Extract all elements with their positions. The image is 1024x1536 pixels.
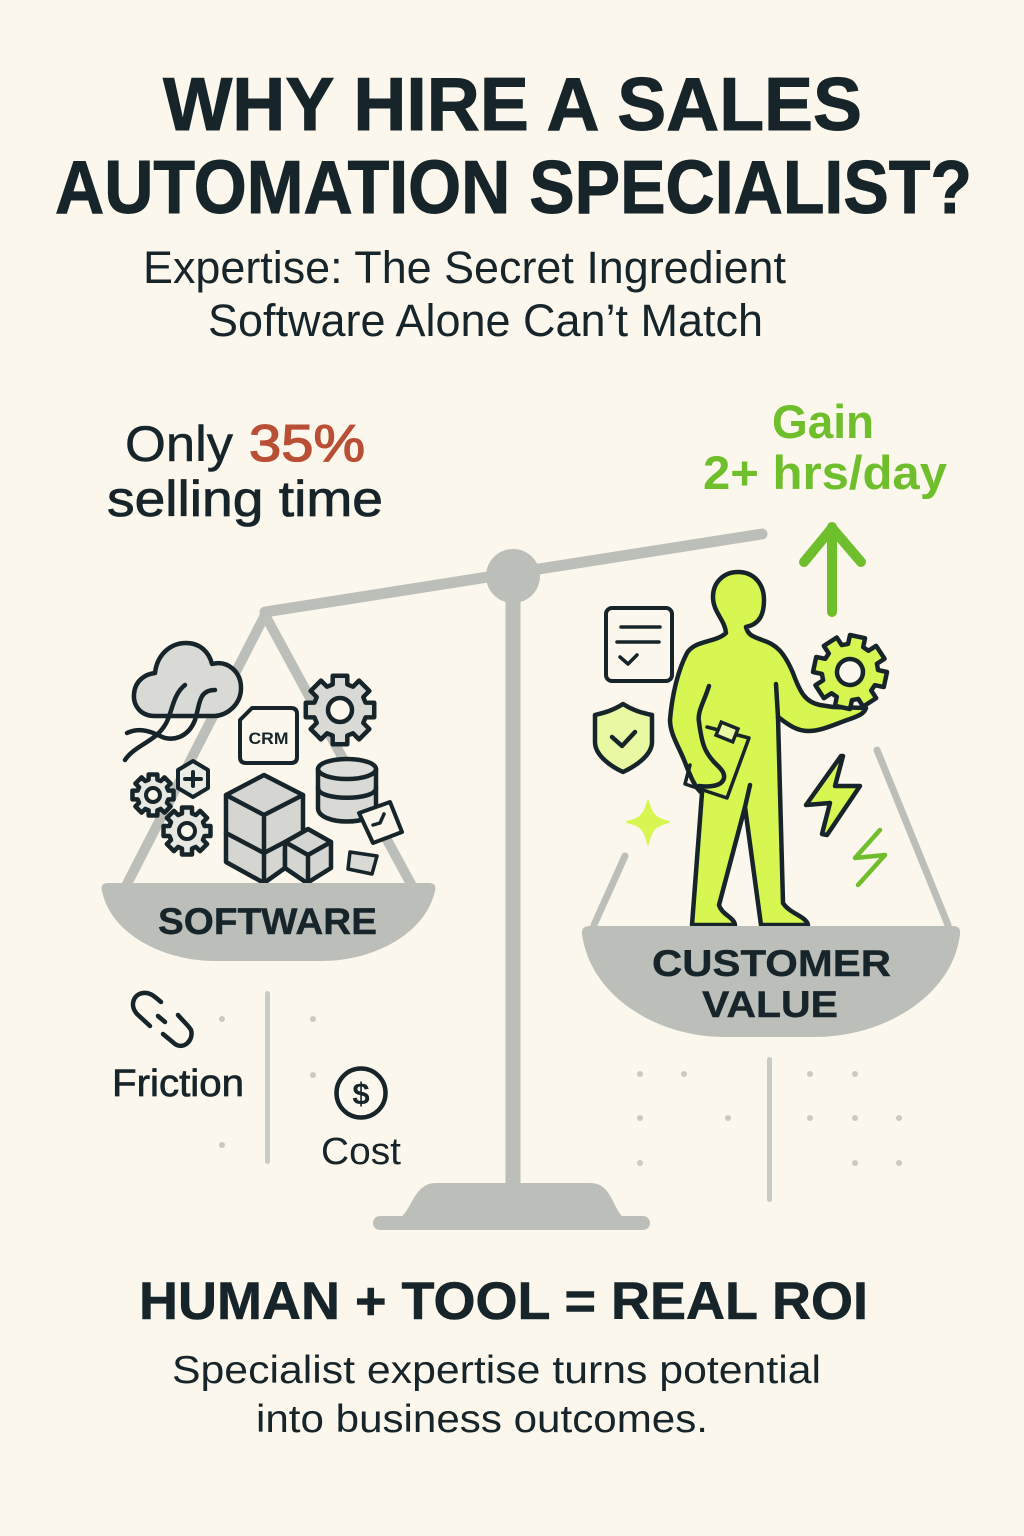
icon: hexagon plus (178, 761, 208, 797)
left pan chains (127, 615, 411, 884)
icon: large lightning bolt (806, 756, 860, 835)
closing text (172, 1349, 821, 1441)
right pan: customer value: VALUE (702, 984, 838, 1025)
person body (670, 572, 866, 925)
icon: CRM box: CRM (248, 729, 288, 748)
icon: dollar coin: $ (352, 1076, 370, 1111)
left pan: software (102, 883, 435, 961)
title: WHY HIRE A SALES (163, 62, 862, 146)
icon: shield (595, 704, 652, 772)
stat: selling time: 35% (249, 415, 365, 473)
friction item (112, 993, 244, 1105)
subtitle: Expertise: The Secret Ingredient (143, 242, 786, 293)
icon: cloud with wires (125, 643, 241, 760)
icon: document checklist (606, 608, 672, 681)
clipboard (685, 722, 749, 798)
right pan: customer value (582, 926, 960, 1037)
icon: small gear (164, 808, 210, 854)
formula heading: HUMAN + TOOL = REAL ROI (139, 1272, 868, 1331)
person with clipboard (670, 572, 866, 925)
icon: up arrow (804, 527, 861, 612)
subtitle (143, 242, 786, 346)
icon: checked note (359, 802, 402, 843)
software icons (125, 643, 402, 883)
arm and leg lines (699, 684, 778, 807)
icon: small gear (132, 774, 174, 816)
right pan chains (594, 750, 948, 925)
icon: gear in hand (807, 629, 893, 715)
cost item (321, 1068, 401, 1173)
cost item: Cost (321, 1131, 401, 1173)
left pan: software: SOFTWARE (158, 901, 377, 942)
icon: CRM box (240, 708, 297, 763)
stat: hours gained (703, 395, 947, 499)
subtitle: Software Alone Can’t Match (208, 295, 763, 346)
icon: broken link (133, 993, 192, 1046)
closing text: into business outcomes. (256, 1398, 708, 1441)
stat: selling time: Only (125, 416, 233, 472)
icon: small lightning bolt (855, 830, 885, 885)
stat: selling time: selling time (107, 471, 383, 527)
icon: database (318, 759, 376, 822)
icon: large gear (306, 676, 374, 744)
stat: selling time (107, 415, 383, 527)
title (55, 62, 972, 229)
scale stand and beam (265, 534, 762, 1230)
icon: sparkle (627, 801, 669, 844)
stat: hours gained: 2+ hrs/day (703, 446, 947, 499)
icon: small tag (348, 852, 377, 874)
right pan: customer value: CUSTOMER (652, 943, 891, 984)
friction item: Friction (112, 1063, 244, 1105)
dividers and dots (219, 991, 902, 1202)
closing text: Specialist expertise turns potential (172, 1349, 821, 1392)
stat: hours gained: Gain (772, 395, 874, 448)
icon: stacked cubes (226, 775, 331, 883)
